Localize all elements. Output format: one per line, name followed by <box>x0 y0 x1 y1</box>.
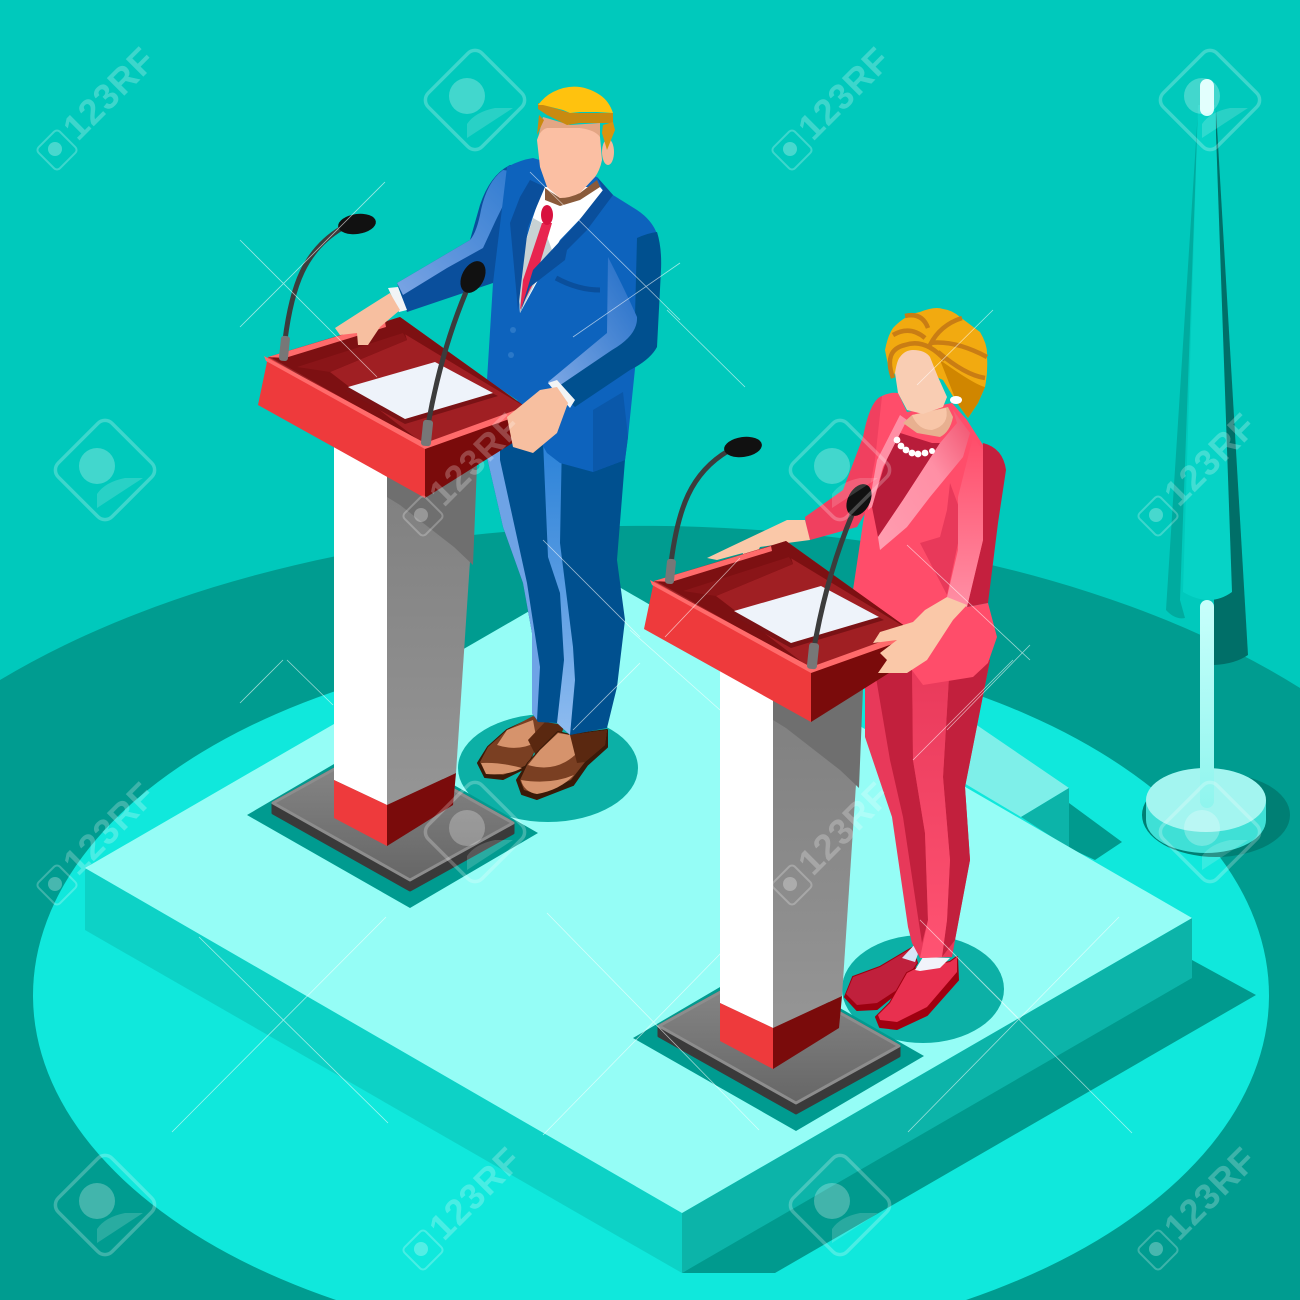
person: man in blue suit <box>397 87 661 799</box>
platform shadow <box>682 960 1256 1273</box>
watermark text: 123RF <box>790 39 899 148</box>
man right arm dark sleeve <box>553 232 661 407</box>
dark floor ellipse <box>0 526 1300 1300</box>
podium top: right <box>644 541 916 722</box>
podium top: left <box>258 317 530 498</box>
man trousers <box>483 440 625 735</box>
watermark text: 123RF <box>1156 405 1265 514</box>
watermark logos small <box>36 129 1179 1271</box>
woman lapels <box>868 410 970 550</box>
watermark text: 123RF <box>1156 1139 1265 1248</box>
woman right arm back <box>967 443 1006 607</box>
watermark text: 123RF <box>55 39 164 148</box>
microphone front: right <box>807 480 877 669</box>
step side <box>1021 788 1069 848</box>
flag stand shadow <box>1142 773 1290 857</box>
woman left arm <box>805 396 897 540</box>
podium column: left <box>247 440 538 908</box>
man tie <box>520 205 553 310</box>
man shoes <box>478 716 607 799</box>
flag stand <box>1142 79 1290 857</box>
man face <box>537 128 602 198</box>
woman trousers <box>865 660 990 958</box>
man jacket shade lower <box>593 392 628 472</box>
person: woman in red suit <box>707 308 1006 1029</box>
man left hand and cuff <box>335 287 407 345</box>
woman right hand <box>873 597 967 673</box>
man shirt <box>518 187 605 313</box>
man neck <box>545 180 600 206</box>
woman left hand <box>707 520 810 567</box>
podium column: right <box>633 663 924 1131</box>
watermark text: 123RF <box>421 1139 530 1248</box>
woman hair <box>885 308 987 418</box>
man pocket <box>556 278 600 290</box>
man buttons <box>508 327 516 358</box>
woman jacket shade <box>920 483 960 595</box>
furled flag shadow left <box>1166 110 1198 618</box>
watermark text: 123RF <box>55 774 164 883</box>
platform left side <box>85 868 682 1273</box>
woman shoes <box>845 942 958 1029</box>
man lapels <box>510 177 613 313</box>
step shadow <box>1069 803 1122 860</box>
man ear <box>602 139 614 165</box>
furled flag <box>1183 105 1232 600</box>
woman pearls <box>894 437 935 457</box>
man right sleeve stripe <box>548 257 637 390</box>
platform right side <box>682 918 1192 1273</box>
woman floor shadow <box>842 935 1004 1043</box>
microphone back: right <box>665 434 763 584</box>
woman earring <box>950 396 962 404</box>
woman face <box>895 350 947 414</box>
flag pole top <box>1200 79 1214 116</box>
man right hand and cuff <box>507 380 575 453</box>
flag pole <box>1200 600 1214 808</box>
woman neck <box>903 407 953 437</box>
microphone front: left <box>421 257 491 446</box>
platform raised step <box>900 700 1069 817</box>
round stage disc <box>33 641 1269 1300</box>
platform top <box>85 573 1192 1213</box>
watermark text: 123RF <box>790 774 899 883</box>
man forehead shade <box>538 117 600 138</box>
woman jacket <box>853 393 997 685</box>
furled flag shadow right <box>1214 110 1248 665</box>
man floor shadow <box>458 714 638 822</box>
man jacket <box>487 158 657 472</box>
microphone back: left <box>279 211 377 361</box>
flag stand base <box>1146 800 1266 853</box>
woman sleeve highlight <box>947 437 983 607</box>
platform <box>85 573 1256 1273</box>
woman top <box>872 432 940 537</box>
man left arm <box>397 165 540 312</box>
man hair <box>537 87 615 150</box>
watermark text: 123RF <box>421 405 530 514</box>
